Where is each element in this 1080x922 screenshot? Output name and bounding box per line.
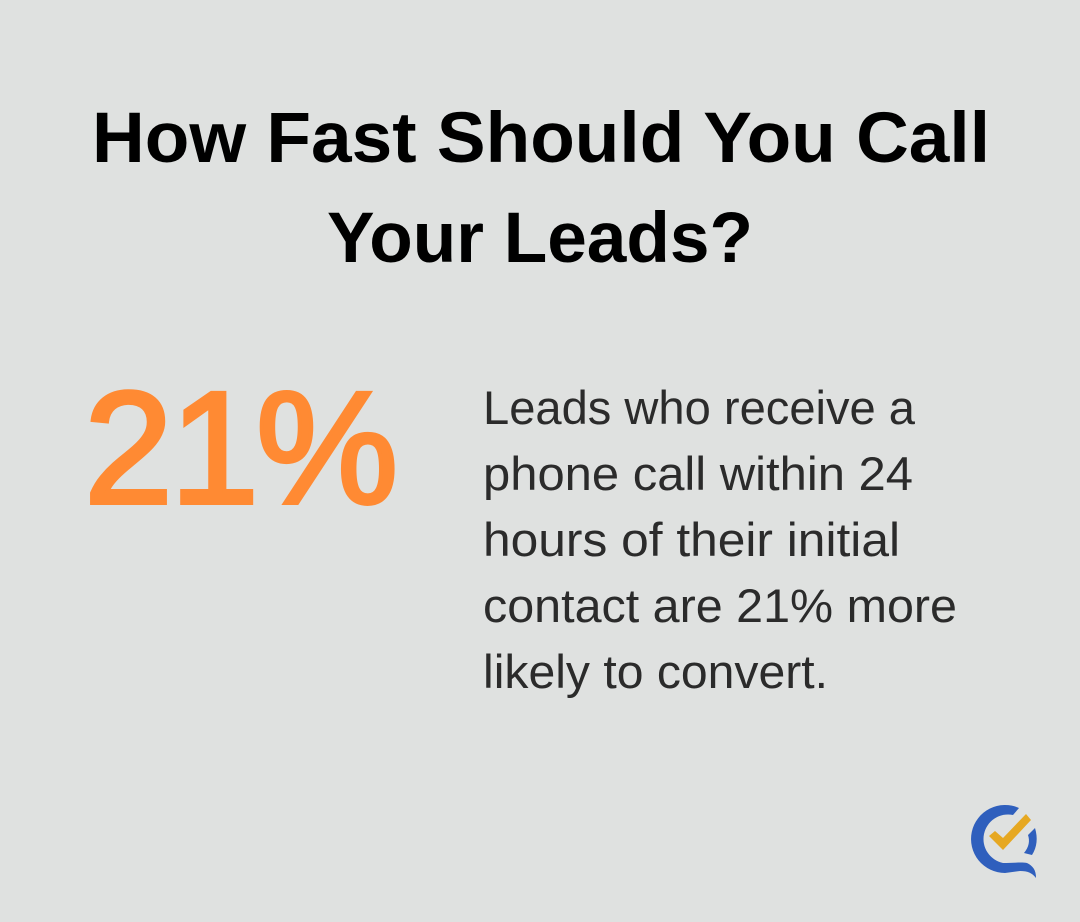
icon: logo chat bubble with check mark xyxy=(971,805,1037,878)
big statistic: 21%: 21% xyxy=(84,358,398,537)
title xyxy=(92,99,990,278)
title: Your Leads? xyxy=(327,199,753,278)
title: How Fast Should You Call xyxy=(92,99,990,178)
description text: likely to convert. xyxy=(483,645,828,698)
description text: phone call within 24 xyxy=(483,447,913,500)
description text: contact are 21% more xyxy=(483,579,957,632)
description text xyxy=(483,381,957,698)
description text: Leads who receive a xyxy=(483,381,916,434)
description text: hours of their initial xyxy=(483,513,900,566)
